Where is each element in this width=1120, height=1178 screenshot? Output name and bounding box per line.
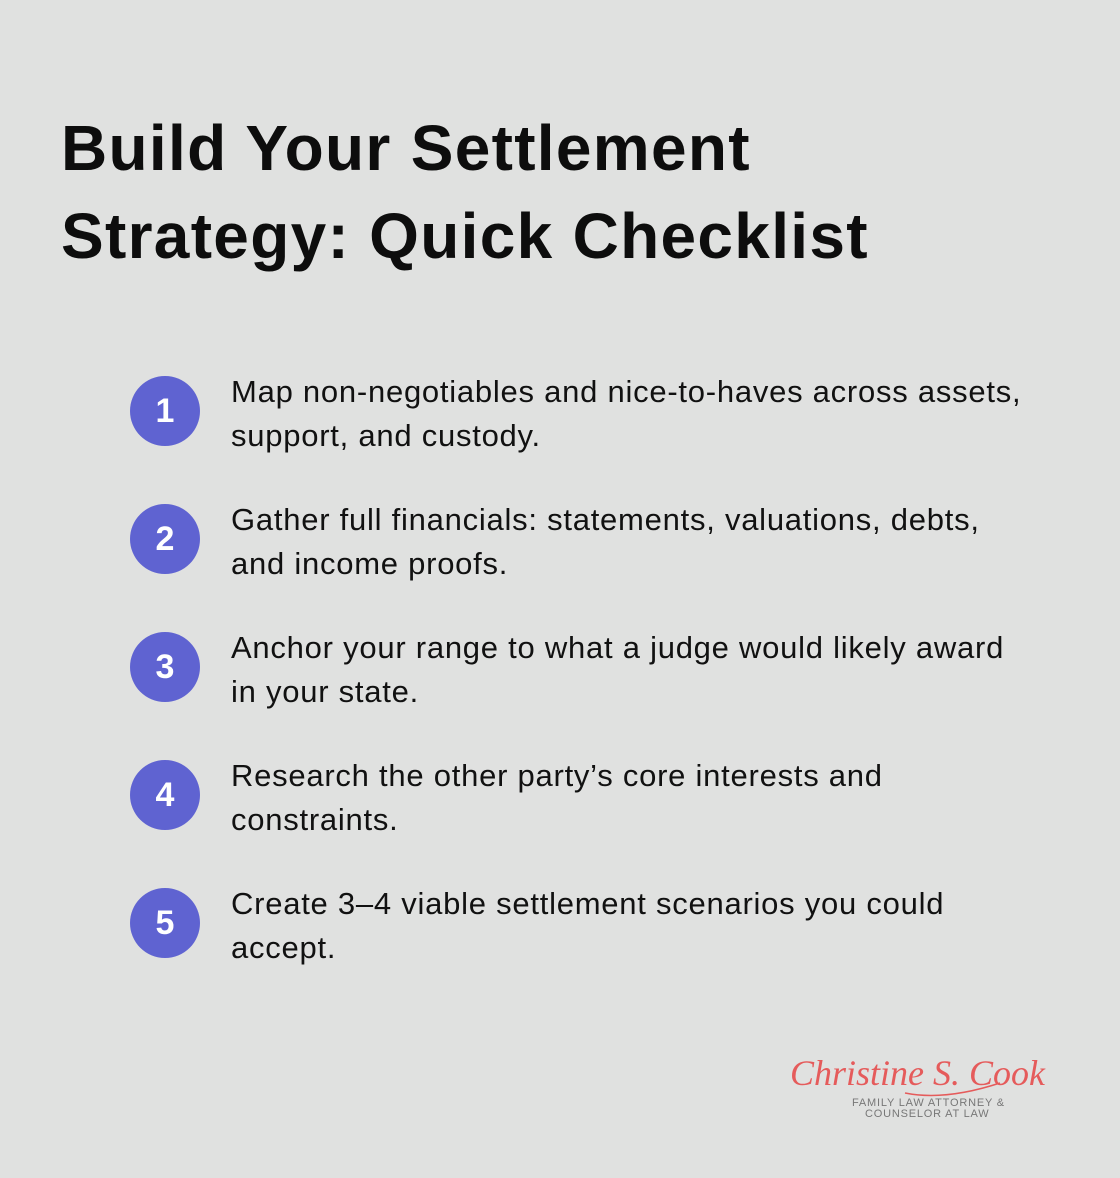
text 3: Anchor your range to what a judge would likely award [231,630,1004,665]
text 1 [231,374,1021,453]
number badge 1 [130,376,200,446]
text 1: support, and custody. [231,418,541,453]
number badge 3 [130,632,200,702]
title [61,112,869,272]
number badge 4: 4 [156,776,174,814]
item 3 [130,630,1004,709]
text 3 [231,630,1004,709]
logo [790,1053,1046,1120]
logo: Christine S. Cook [790,1053,1046,1093]
logo: FAMILY LAW ATTORNEY & [852,1097,1005,1109]
item 2 [130,502,980,581]
number badge 5 [130,888,200,958]
text 5 [231,886,944,965]
logo: COUNSELOR AT LAW [865,1108,989,1120]
number badge 2: 2 [156,520,174,558]
number badge 3: 3 [156,648,174,686]
text 2 [231,502,980,581]
number badge 1: 1 [156,392,174,430]
item 4 [130,758,883,837]
text 2: Gather full financials: statements, valuations, debts, [231,502,980,537]
text 4: Research the other party’s core interests and [231,758,883,793]
number badge 5: 5 [156,904,174,942]
text 5: accept. [231,930,336,965]
item 5 [130,886,944,965]
title: Strategy: Quick Checklist [61,200,869,272]
text 2: and income proofs. [231,546,508,581]
title: Build Your Settlement [61,112,751,184]
number badge 4 [130,760,200,830]
text 3: in your state. [231,674,419,709]
text 4: constraints. [231,802,399,837]
item 1 [130,374,1021,453]
text 5: Create 3–4 viable settlement scenarios you could [231,886,944,921]
text 1: Map non-negotiables and nice-to-haves across assets, [231,374,1021,409]
text 4 [231,758,883,837]
number badge 2 [130,504,200,574]
